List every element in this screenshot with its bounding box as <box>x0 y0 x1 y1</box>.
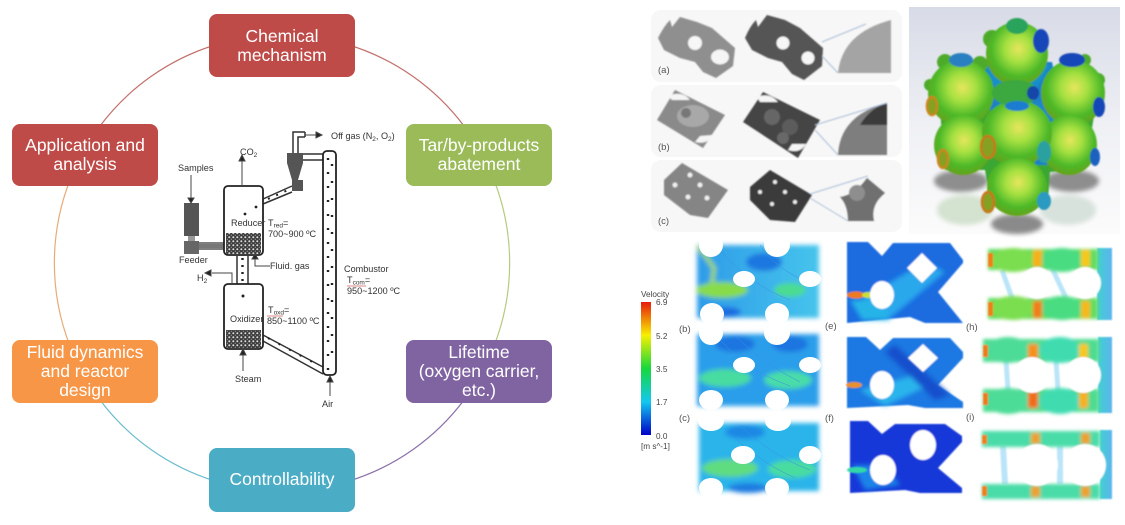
diagram labels: 2 <box>254 152 258 159</box>
diagram labels: 2 <box>372 136 376 143</box>
panel i <box>983 337 1112 414</box>
box: Chemical mechanism <box>209 14 355 77</box>
box: Chemical mechanism: Chemical <box>246 26 318 46</box>
velocity legend: 6.9 <box>656 298 668 307</box>
panel g <box>847 421 962 493</box>
diagram labels: 850~1100 ºC <box>267 316 320 326</box>
velocity legend: 1.7 <box>656 398 668 407</box>
box: Tar/by-products abatement <box>406 124 552 186</box>
panel: scaffold geometries a-c: (a) <box>658 65 670 76</box>
row c <box>664 163 885 222</box>
oxidizer vessel: Oxidizer <box>230 314 263 324</box>
reducer vessel: Reducer <box>231 218 265 228</box>
box: Lifetime: (oxygen carrier, <box>419 361 539 381</box>
panel b <box>696 233 821 325</box>
diagram labels: Fluid. gas <box>270 261 310 271</box>
velocity legend: Velocity <box>641 290 670 299</box>
velocity legend: 5.2 <box>656 332 668 341</box>
flow panel labels: (i) <box>966 412 974 423</box>
diagram labels: , O <box>376 131 388 141</box>
diagram labels: Off gas (N <box>331 131 372 141</box>
reducer vessel <box>224 186 265 255</box>
box: Application and analysis <box>12 124 158 186</box>
box: Tar/by-products abatement: Tar/by-products <box>419 135 540 155</box>
flow field: left column <box>696 233 821 498</box>
flow panel labels: (h) <box>966 322 978 333</box>
box: Application and analysis: Application and <box>25 135 145 155</box>
diagram labels: ) <box>392 131 395 141</box>
flow panel labels: (e) <box>825 321 837 332</box>
diagram labels: 2 <box>204 278 208 285</box>
diagram labels: CO <box>240 147 254 157</box>
diagram labels: red <box>274 222 283 230</box>
feeder <box>184 203 199 254</box>
diagram labels: Air <box>322 399 333 409</box>
diagram labels: 700~900 ºC <box>268 229 317 239</box>
panel j <box>982 430 1112 499</box>
diagram labels: Combustor <box>344 264 388 274</box>
box: Lifetime: etc.) <box>462 380 496 400</box>
diagram labels: T <box>347 275 353 285</box>
velocity legend: 0.0 <box>656 432 668 441</box>
panel: scaffold geometries a-c <box>651 10 902 232</box>
combustor riser <box>323 151 336 375</box>
connecting arrows <box>188 132 333 396</box>
diagram labels: 2 <box>388 136 392 143</box>
diagram labels: = <box>283 218 288 228</box>
box: Fluid dynamics and reactor design: Fluid dynamics <box>27 342 144 362</box>
floor reflection and shadow <box>934 170 1099 234</box>
row b <box>657 90 887 158</box>
diagram labels: = <box>284 305 289 315</box>
panel: scaffold geometries a-c: (c) <box>658 216 669 227</box>
diagram labels: H <box>197 273 204 283</box>
diagram labels: = <box>365 275 370 285</box>
cycle ring connecting the six topics <box>54 45 510 481</box>
box: Controllability <box>209 448 355 512</box>
diagram labels: Steam <box>235 374 261 384</box>
lattice nodes <box>924 18 1105 216</box>
diagram labels: Feeder <box>179 255 208 265</box>
box: Fluid dynamics and reactor design <box>12 340 158 403</box>
diagram labels: Samples <box>178 163 214 173</box>
flow panel labels: (b) <box>679 324 691 335</box>
panel f <box>846 337 963 408</box>
oxidizer vessel <box>224 284 263 349</box>
panel e <box>847 242 963 323</box>
box: Fluid dynamics and reactor design: and reactor <box>41 361 129 381</box>
flow field: right column <box>982 248 1112 499</box>
flow panel labels <box>679 321 978 424</box>
velocity legend: [m s^-1] <box>641 442 670 451</box>
panel d <box>698 411 821 498</box>
panel: 3D velocity-coloured lattice <box>909 7 1120 234</box>
diagram labels: T <box>268 218 274 228</box>
box: Lifetime <box>406 340 552 403</box>
diagram labels: oxd <box>274 310 284 316</box>
box: Fluid dynamics and reactor design: design <box>59 380 111 400</box>
diagram labels: 950~1200 ºC <box>347 286 401 296</box>
reactor process diagram <box>178 131 401 409</box>
diagram labels: T <box>268 305 274 315</box>
box: Chemical mechanism: mechanism <box>237 45 327 65</box>
diagram labels <box>178 131 401 409</box>
red underlines <box>267 286 366 316</box>
velocity legend: 3.5 <box>656 365 668 374</box>
box: Application and analysis: analysis <box>53 154 117 174</box>
flow field: middle column <box>846 242 963 493</box>
velocity legend <box>641 290 670 451</box>
row a <box>658 15 891 80</box>
flow panel labels: (c) <box>679 413 690 424</box>
box: Tar/by-products abatement: abatement <box>438 154 520 174</box>
flow panel labels: (f) <box>825 413 834 424</box>
diagram labels: com <box>353 280 365 286</box>
box: Controllability: Controllability <box>229 469 335 489</box>
cyclone <box>287 153 303 191</box>
panel h <box>988 248 1112 320</box>
panel: scaffold geometries a-c: (b) <box>658 142 670 153</box>
box: Lifetime: Lifetime <box>448 342 510 362</box>
panel c <box>697 321 821 410</box>
